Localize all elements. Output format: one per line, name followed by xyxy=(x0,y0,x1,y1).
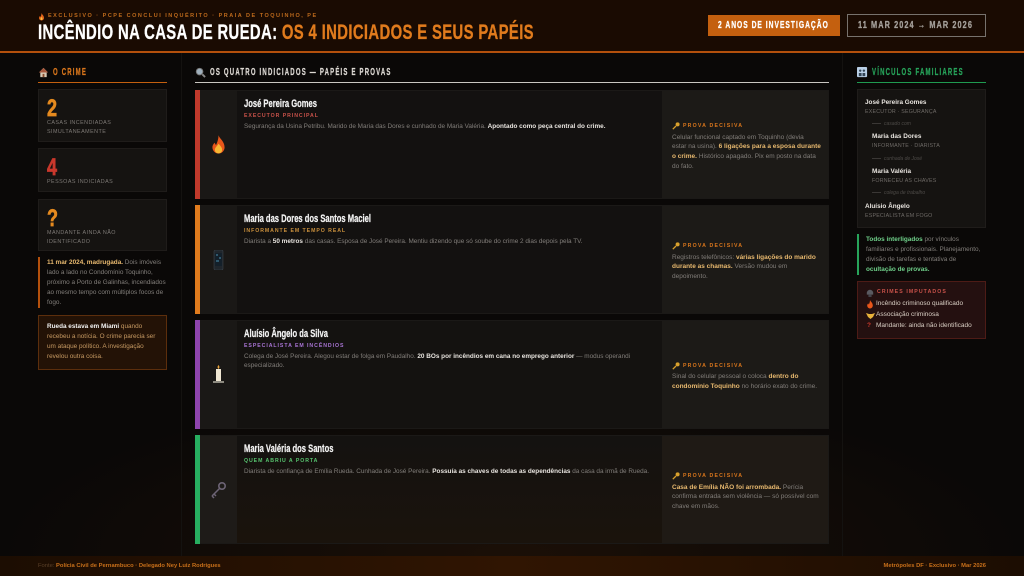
heading: o crime xyxy=(38,66,167,83)
text: interligados: Todos interligados por vínculos xyxy=(866,236,959,243)
name: Aluísio Ângelo da Silva xyxy=(244,328,328,340)
role: INFORMANTE EM TEMPO REAL xyxy=(244,228,346,234)
callout title: CRIMES IMPUTADOS xyxy=(877,289,947,295)
stat: mandante xyxy=(38,199,167,251)
source: Fonte: Polícia Civil de Pernambuco · Delegado Ney Luiz Rodrigues xyxy=(38,563,221,569)
panel: vínculos familiares xyxy=(857,66,986,339)
badge: duration: 2 ANOS DE INVESTIGAÇÃO xyxy=(718,20,829,31)
family tree: EXECUTOR · SEGURANÇA xyxy=(865,109,937,115)
evidence xyxy=(662,91,828,198)
text: madrugada xyxy=(38,257,167,308)
stat: pessoas: 4 xyxy=(47,154,57,181)
icon: key xyxy=(200,436,237,543)
description: Segurança da Usina Petribu. Marido de Maria das Dores e cunhado de Maria Valéria. Apontado como peça central do crime. xyxy=(244,123,605,130)
evidence text: o crime. Histórico apagado. Pix em posto na data xyxy=(672,153,816,160)
heading: vínculos: VÍNCULOS FAMILIARES xyxy=(872,67,964,78)
evidence text: confirma entrada sem violência — só possível com xyxy=(672,493,819,500)
crime list: Incêndio criminoso qualificado xyxy=(876,300,963,307)
text: interligados: familiares e profissionais. Planejamento, xyxy=(866,246,980,253)
stat: mandante: ? xyxy=(47,205,58,232)
evidence xyxy=(662,321,828,428)
header xyxy=(0,0,1024,53)
crime list xyxy=(866,300,972,329)
description: especializado. xyxy=(244,362,285,369)
evidence text xyxy=(672,254,816,280)
text: madrugada: próximo a Porto de Galinhas, incendiados xyxy=(47,279,166,286)
person: Maria Valéria: Maria Valéria xyxy=(872,168,911,175)
badge: dates: 11 MAR 2024 → MAR 2026 xyxy=(858,20,973,31)
text: interligados xyxy=(857,234,986,275)
callout: miami: revelou outra coisa. xyxy=(47,353,103,360)
evidence label: PROVA DECISIVA xyxy=(683,363,743,369)
stat: mandante: MANDANTE AINDA NÃO xyxy=(47,230,116,236)
warm background glow xyxy=(0,380,1024,556)
name: Maria Valéria dos Santos xyxy=(244,443,333,455)
credit: Metrópoles DF · Exclusivo · Mar 2026 xyxy=(884,563,986,569)
stat: casas: SIMULTANEAMENTE xyxy=(47,128,106,134)
stat: pessoas xyxy=(38,148,167,192)
badge: dates xyxy=(847,14,986,37)
card: Aluísio Ângelo xyxy=(195,320,829,429)
icon: candle xyxy=(200,321,237,428)
description: Colega de José Pereira. Alegou estar de folga em Paudalho. 20 BOs por incêndios em cana no emprego anterior — modus operandi xyxy=(244,353,630,360)
color bar xyxy=(195,435,200,544)
stat: casas: 2 xyxy=(47,95,57,122)
color bar xyxy=(195,320,200,429)
person: Aluísio: Aluísio Ângelo xyxy=(865,203,910,210)
evidence text: durante as chamas. Versão mudou em xyxy=(672,263,787,270)
eyebrow: EXCLUSIVO · PCPE CONCLUI INQUÉRITO · PRAIA DE TOQUINHO, PE xyxy=(48,13,318,19)
evidence label: PROVA DECISIVA xyxy=(683,243,743,249)
evidence text: do fato. xyxy=(672,163,694,170)
text: madrugada: ao mesmo tempo com múltiplos focos de xyxy=(47,289,163,296)
crime list: Associação criminosa xyxy=(876,311,939,318)
evidence label xyxy=(672,122,743,130)
callout: miami: um ataque político. A investigação xyxy=(47,343,144,350)
evidence text: depoimento. xyxy=(672,273,708,280)
link: cunhada: cunhada de José xyxy=(884,156,922,162)
evidence xyxy=(662,436,828,543)
description: Diarista a 50 metros das casas. Esposa de José Pereira. Mentiu dizendo que só soube do crime 2 dias depois pela TV. xyxy=(244,238,583,245)
evidence text xyxy=(672,373,817,390)
evidence text: Registros telefônicos: várias ligações do marido xyxy=(672,254,816,261)
evidence text: Celular funcional captado em Toquinho (devia xyxy=(672,134,804,141)
callout: miami: Rueda estava em Miami quando xyxy=(47,323,142,330)
text: madrugada: fogo. xyxy=(47,299,61,306)
family tree xyxy=(857,89,986,228)
heading: vínculos xyxy=(857,66,986,83)
callout: crimes imputados xyxy=(857,281,986,339)
evidence text: Sinal do celular pessoal o coloca dentro do xyxy=(672,373,798,380)
link: colega: colega de trabalho xyxy=(884,190,925,196)
role: EXECUTOR PRINCIPAL xyxy=(244,112,319,118)
footer xyxy=(0,556,1024,576)
title: INCÊNDIO NA CASA DE RUEDA: OS 4 INDICIADOS E SEUS PAPÉIS xyxy=(38,21,534,44)
role: ESPECIALISTA EM INCÊNDIOS xyxy=(244,342,344,348)
eyebrow xyxy=(39,12,318,20)
evidence label xyxy=(672,242,743,250)
panel: o crime xyxy=(38,67,167,370)
evidence label xyxy=(672,362,743,370)
link: casado com: casado com xyxy=(884,121,911,127)
family tree: FORNECEU AS CHAVES xyxy=(872,178,936,184)
description xyxy=(244,353,630,369)
name: José Pereira Gomes xyxy=(244,98,317,110)
family tree: ESPECIALISTA EM FOGO xyxy=(865,213,932,219)
stat: casas xyxy=(38,89,167,142)
color bar xyxy=(195,90,200,199)
role: QUEM ABRIU A PORTA xyxy=(244,458,318,464)
name: Maria das Dores dos Santos Maciel xyxy=(244,213,371,225)
evidence text xyxy=(672,134,821,170)
evidence text: condomínio Toquinho no horário exato do crime. xyxy=(672,383,817,390)
text: interligados: divisão de tarefas e tentativa de xyxy=(866,256,956,263)
panel: os quatro indiciados xyxy=(195,66,829,83)
callout title xyxy=(866,289,947,297)
evidence label xyxy=(672,472,743,480)
evidence text: chave em mãos. xyxy=(672,503,720,510)
text: madrugada: 11 mar 2024, madrugada. Dois imóveis xyxy=(47,259,161,266)
description: Diarista de confiança de Emília Rueda. Cunhada de José Pereira. Possuía as chaves de todas as dependências da casa da irmã de Rueda. xyxy=(244,468,649,475)
crime list: ? xyxy=(867,322,871,329)
crime list: Mandante: ainda não identificado xyxy=(876,322,972,329)
heading: indiciados xyxy=(195,66,829,83)
stat: mandante: IDENTIFICADO xyxy=(47,238,90,244)
evidence xyxy=(662,206,828,313)
evidence text: estar na usina). 6 ligações para a esposa durante xyxy=(672,143,821,150)
evidence label: PROVA DECISIVA xyxy=(683,473,743,479)
heading: indiciados: OS QUATRO INDICIADOS — PAPÉIS E PROVAS xyxy=(210,67,392,78)
icon: fire xyxy=(200,91,237,198)
card: José Pereira Gomes xyxy=(195,90,829,199)
icon: phone xyxy=(200,206,237,313)
stat: pessoas: PESSOAS INDICIADAS xyxy=(47,179,113,185)
text: interligados: ocultação de provas. xyxy=(866,266,930,273)
stat: casas: CASAS INCENDIADAS xyxy=(47,120,111,126)
family tree: INFORMANTE · DIARISTA xyxy=(872,143,940,149)
color bar xyxy=(195,205,200,314)
evidence text: Casa de Emília NÃO foi arrombada. Perícia xyxy=(672,484,803,491)
card: Maria Valéria xyxy=(195,435,829,544)
badge: duration xyxy=(708,15,840,36)
card: Maria das Dores xyxy=(195,205,829,314)
person: José: José Pereira Gomes xyxy=(865,99,926,106)
evidence label: PROVA DECISIVA xyxy=(683,123,743,129)
heading: o crime: O CRIME xyxy=(53,67,87,78)
text: madrugada: lado a lado no Condomínio Toquinho, xyxy=(47,269,153,276)
callout: miami: recebeu a notícia. O crime parecia ser xyxy=(47,333,155,340)
callout: miami xyxy=(38,315,167,370)
evidence text xyxy=(672,483,819,510)
person: Maria das Dores: Maria das Dores xyxy=(872,133,921,140)
